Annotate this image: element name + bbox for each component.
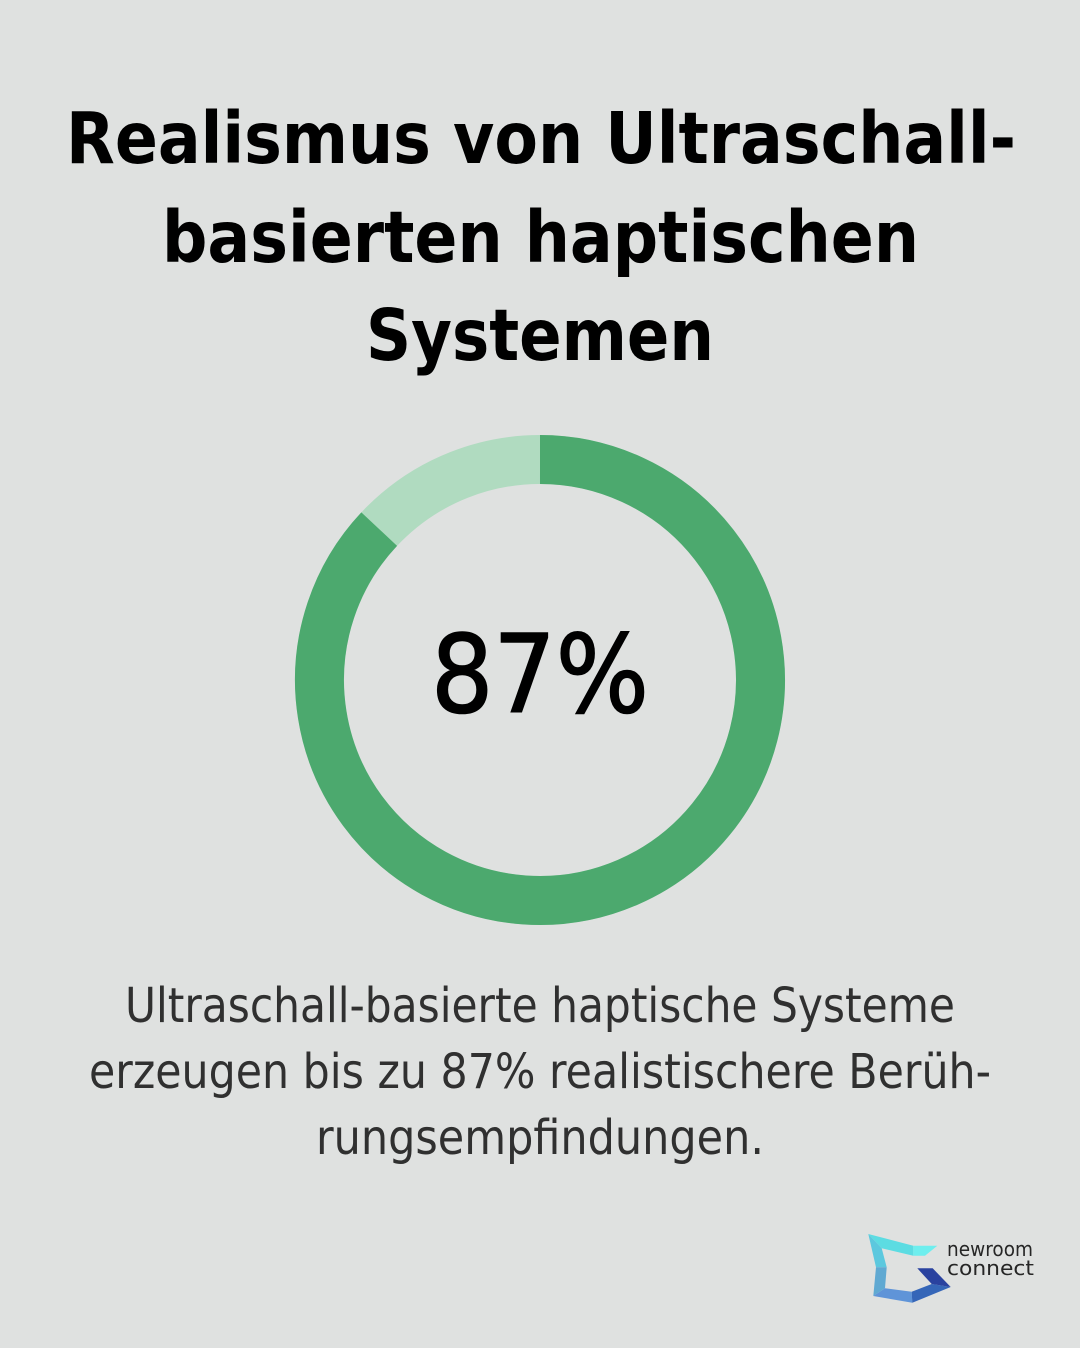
donut value: 87% — [431, 613, 649, 738]
logo: newroom connect — [868, 1234, 1034, 1303]
description — [89, 978, 991, 1166]
logo wordmark — [947, 1237, 1034, 1280]
description: Ultraschall-basierte haptische Systeme — [125, 978, 955, 1034]
logo wordmark: newroom — [947, 1237, 1033, 1261]
title: basierten haptischen — [162, 196, 919, 279]
title: Systemen — [366, 294, 714, 377]
donut chart: 87% — [319, 460, 760, 900]
logo wordmark: connect — [947, 1256, 1034, 1280]
description: rungsempfindungen. — [316, 1110, 764, 1166]
title — [66, 97, 1016, 377]
description: erzeugen bis zu 87% realistischere Berüh- — [89, 1044, 991, 1100]
logo mark — [868, 1234, 951, 1303]
